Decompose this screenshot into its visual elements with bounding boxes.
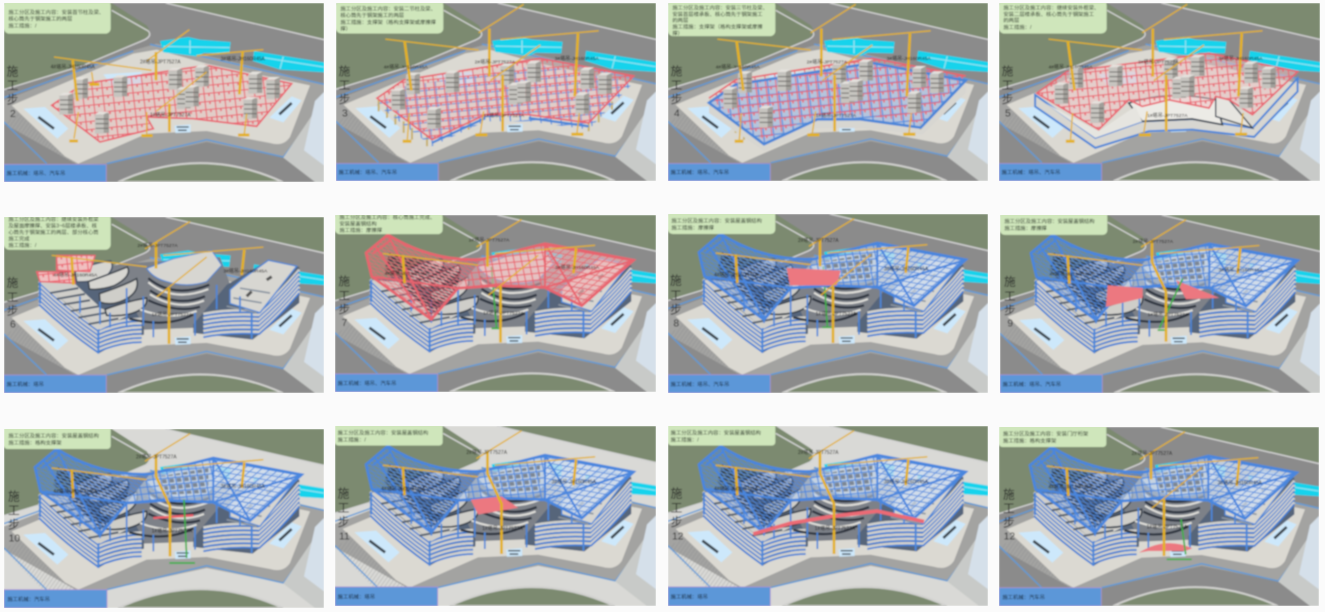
step label: 施 (1002, 65, 1014, 78)
step label: 施 (7, 65, 19, 78)
crane labels: 4#塔吊-JH160R45A (714, 271, 759, 278)
crane labels: 1#塔吊-JPT7527A (150, 111, 191, 118)
crane labels: 1#塔吊-JPT7527A (816, 310, 857, 317)
step label: 步 (671, 516, 682, 529)
step label: 施 (1004, 275, 1016, 288)
crane labels: 4#塔吊-JH160R45A (53, 488, 98, 495)
step label: 工 (7, 292, 18, 304)
crane labels: 2#塔吊-JPT7527A (798, 237, 839, 244)
crane labels: 2#塔吊-JPT7527A (140, 59, 181, 66)
callout: step content (4, 0, 111, 34)
machinery bar: 施工机械：塔吊、汽车吊 (1002, 168, 1060, 176)
site model with blue roof and red entrance truss (999, 427, 1319, 606)
step label (671, 488, 684, 542)
site model with frame and first floor decks (668, 3, 988, 181)
panel: construction step 12 (entrance hall truss) (999, 427, 1319, 606)
callout: step content: 施工分区及施工内容：安装屋盖钢结构 (8, 432, 99, 440)
step label: 施 (1003, 488, 1015, 501)
site model with blue roof and red flanking sections (1000, 215, 1320, 393)
step label (8, 490, 20, 545)
step label: 工 (339, 79, 351, 92)
crane labels: 1#塔吊-JPT7527A (152, 311, 193, 318)
step label: 5 (1005, 108, 1011, 119)
panel: construction step 9 (1000, 215, 1320, 393)
site model with flat steel frame (4, 3, 324, 182)
panel: construction step 10 (4, 429, 324, 608)
red roof sections (1106, 280, 1219, 307)
step label (7, 65, 19, 120)
machinery bar (999, 163, 1102, 181)
step label: 步 (671, 93, 682, 106)
crane labels: 4#塔吊-JH160R45A (384, 270, 429, 277)
crane labels (714, 449, 929, 532)
callout: step content: 的两层 (672, 16, 688, 24)
crane labels: 3#塔吊-JH160R45A (552, 479, 597, 486)
crane labels: 3#塔吊-JH160R45A (884, 479, 929, 486)
callout: step content (336, 0, 443, 33)
red roof section (787, 268, 841, 285)
step label: 12 (672, 531, 684, 542)
crane labels: 3#塔吊-JH160R45A (1219, 266, 1263, 273)
crane labels: 4#塔吊-JH160R45A (51, 64, 96, 71)
crane labels: 1#塔吊-JPT7527A (482, 525, 523, 532)
callout: step content: 安装屋盖钢结构 (339, 220, 377, 228)
red entrance truss (1139, 543, 1192, 553)
crane labels: 2#塔吊-JPT7527A (469, 236, 510, 243)
step label: 6 (10, 320, 16, 330)
step label: 工 (338, 502, 350, 515)
panel: construction step 11 (335, 426, 656, 606)
crane labels: 3#塔吊-JH160R45A (887, 55, 931, 62)
crane labels: 3#塔吊-JH160R45A (555, 55, 599, 62)
step label: 7 (342, 318, 348, 329)
step label (670, 275, 682, 329)
step label: 2 (10, 109, 16, 120)
step label: 步 (339, 93, 350, 106)
callout: step content: 及屋面摩擦撑、安装3~6层楼承板、核 (8, 222, 98, 229)
step label: 4 (674, 108, 680, 119)
callout: step content: 施工措施：摩擦撑 (339, 226, 383, 234)
crane labels: 2#塔吊-JPT7527A (137, 242, 178, 249)
callout: step content: 施工分区及施工内容：安装门厅桁架 (1003, 430, 1089, 438)
callout: step content: 施工措施：摩擦撑 (1004, 224, 1048, 232)
machinery bar (335, 587, 438, 606)
crane labels (714, 237, 929, 317)
site model with blue roof and red centre (335, 426, 656, 606)
machinery bar (4, 375, 106, 393)
callout: step content (999, 424, 1106, 447)
crane labels: 3#塔吊-JH160R45A (1218, 55, 1263, 62)
crane labels: 4#塔吊-JH160R45A (714, 485, 759, 492)
crane labels: 1#塔吊-JPT7527A (484, 112, 525, 119)
callout: step content (335, 212, 443, 234)
callout: step content: 施工措施：支撑架（格构支撑架或摩擦撑 (340, 18, 437, 26)
crane labels: 4#塔吊-JH160R45A (384, 63, 428, 70)
step label: 10 (9, 534, 20, 545)
machinery bar: 施工机械：塔吊 (7, 380, 44, 388)
crane labels: 1#塔吊-JPT7527A (1147, 112, 1188, 119)
crane labels: 3#塔吊-JH160R45A (223, 268, 268, 275)
step label: 步 (7, 94, 18, 107)
callout: step content: 施工措施：格构支撑架 (1003, 436, 1057, 444)
callout: step content: 施工措施：摩擦撑 (671, 223, 715, 231)
step label: 工 (670, 289, 682, 302)
machinery bar (336, 163, 438, 181)
machinery bar: 施工机械：汽车吊 (7, 595, 50, 603)
crane labels: 2#塔吊-JPT7527A (136, 453, 177, 460)
machinery bar (335, 374, 438, 392)
machinery bar: 施工机械：塔吊、汽车吊 (671, 380, 729, 388)
callout: step content: 安装二层楼承板、核心筒先于钢架施工 (1003, 10, 1095, 18)
panel: construction step 4 (668, 3, 988, 181)
site model with red frame and curved slabs (999, 3, 1320, 181)
machinery bar (1000, 375, 1102, 393)
crane labels: 1#塔吊-JPT7527A (483, 310, 524, 317)
step label: 施 (8, 490, 20, 503)
machinery bar: 施工机械：汽车吊 (1002, 593, 1045, 601)
step label: 工 (1002, 79, 1014, 92)
step label: 8 (673, 318, 679, 329)
crane labels (51, 55, 266, 118)
step label: 工 (7, 80, 19, 93)
callout: step content: 撑） (340, 25, 351, 33)
crane labels: 4#塔吊-JH160R45A (1048, 483, 1093, 490)
callout: step content (668, 423, 775, 445)
callout: step content: 心筒先于钢架施工的两层、部分核心筒 (8, 228, 99, 236)
machinery bar (4, 590, 107, 608)
step label: 3 (342, 108, 348, 119)
crane labels (1048, 55, 1263, 119)
callout: step content: 的两层 (1003, 16, 1019, 24)
crane labels (1048, 450, 1263, 530)
step label (1004, 275, 1016, 330)
callout: step content: 施工分区及施工内容：继续安装外框梁、 (1003, 4, 1099, 12)
callout: step content: 施工措施：格构支撑架 (8, 439, 62, 447)
step label: 步 (338, 303, 350, 316)
crane labels: 1#塔吊-JPT7527A (1148, 311, 1189, 318)
crane labels (384, 236, 600, 317)
crane labels: 4#塔吊-JH160R45A (1048, 63, 1093, 70)
step label: 施 (338, 275, 350, 288)
step label: 工 (1003, 502, 1015, 515)
step label: 施 (671, 65, 683, 78)
step label: 施 (670, 275, 682, 288)
machinery bar: 施工机械：塔吊、汽车吊 (338, 379, 396, 387)
red roof member (153, 515, 193, 518)
step label (671, 65, 683, 119)
site model with blue roof and red bar (4, 429, 324, 608)
step label: 步 (670, 303, 682, 316)
step label (7, 277, 19, 330)
step label: 步 (1002, 93, 1013, 106)
callout: step content (668, 211, 775, 234)
crane labels (381, 449, 597, 532)
site model with concrete terraced building (4, 217, 324, 393)
step label: 步 (8, 518, 20, 531)
machinery bar (999, 588, 1101, 606)
crane labels: 3#塔吊-JH160R45A (221, 55, 266, 62)
step label: 12 (1004, 532, 1015, 543)
callout: step content: 施工措施：/ (671, 435, 699, 443)
step label: 施 (671, 488, 683, 501)
step label: 施 (339, 65, 351, 78)
machinery bar: 施工机械：塔吊 (671, 592, 708, 600)
callout: step content (999, 0, 1107, 33)
step label: 工 (338, 289, 350, 302)
machinery bar: 施工机械：塔吊 (338, 592, 375, 600)
panel: construction step 5 (999, 3, 1320, 181)
callout: step content (4, 426, 111, 449)
callout: step content: 施工分区及施工内容：安装屋盖钢结构 (671, 429, 761, 437)
crane labels: 3#塔吊-JH160R45A (884, 266, 929, 273)
machinery bar: 施工机械：塔吊、汽车吊 (1003, 380, 1061, 388)
step label: 工 (1004, 290, 1016, 303)
step label: 步 (1003, 516, 1015, 529)
callout: step content: 施工分区及施工内容：安装屋盖钢结构 (338, 429, 428, 437)
crane labels: 1#塔吊-JPT7527A (815, 525, 856, 532)
step label (1003, 488, 1015, 543)
step label: 工 (671, 502, 683, 515)
site model with blue roof and red central section (668, 214, 988, 393)
machinery bar: 施工机械：塔吊、汽车吊 (339, 168, 397, 176)
callout: step content: 施工完成 (8, 235, 30, 243)
red front edge (753, 511, 924, 534)
callout: step content: 核心筒先于钢架施工的两层 (340, 11, 404, 19)
panel: construction step 7 (335, 213, 656, 392)
machinery bar (668, 163, 770, 181)
crane labels: 1#塔吊-JPT7527A (816, 112, 857, 119)
crane labels: 1#塔吊-JPT7527A (1147, 523, 1188, 530)
site model with blue roof and red front edge (668, 426, 988, 606)
crane labels (1049, 238, 1263, 318)
crane labels: 2#塔吊-JPT7527A (1138, 58, 1179, 65)
crane labels: 2#塔吊-JPT7527A (1133, 238, 1174, 245)
machinery bar: 施工机械：塔吊、汽车吊 (7, 169, 65, 177)
callout: step content (4, 214, 111, 250)
panel: construction step 6 (4, 215, 324, 393)
crane labels: 2#塔吊-JPT7527A (1132, 450, 1173, 457)
callout: step content: 安装首层楼承板、核心筒先于钢架施工 (672, 10, 763, 18)
panel: construction step 12 (668, 426, 988, 606)
crane labels: 2#塔吊-JPT7527A (807, 58, 848, 65)
crane labels: 2#塔吊-JPT7527A (466, 449, 508, 456)
step label (339, 65, 351, 119)
crane labels (53, 453, 266, 534)
callout: step content: 施工措施：/ (8, 241, 37, 249)
crane labels: 1#塔吊-JPT7527A (152, 527, 193, 534)
callout: step content: 核心筒先于钢架施工的两层 (8, 15, 73, 23)
callout: step content: 施工措施：/ (8, 21, 37, 29)
callout: step content: 施工措施：/ (338, 435, 366, 443)
step label: 11 (339, 531, 350, 542)
crane labels (716, 55, 931, 119)
panel: construction step 8 (668, 214, 988, 393)
callout: step content (668, 0, 775, 37)
site model with raised frame (336, 3, 656, 181)
callout: step content (1000, 212, 1107, 235)
step label: 步 (338, 516, 349, 529)
crane labels: 2#塔吊-JPT7527A (798, 449, 839, 456)
callout: step content: 施工分区及施工内容：安装屋盖钢结构 (1004, 217, 1095, 225)
callout: step content: 施工分区及施工内容：安装首节柱及梁、 (8, 8, 104, 16)
crane labels: 3#塔吊-JH160R45A (1218, 479, 1263, 486)
machinery bar (668, 375, 770, 393)
crane labels: 4#塔吊-JH160R45A (1049, 270, 1094, 277)
step label: 工 (671, 79, 683, 92)
crane labels: 4#塔吊-JH160R45A (381, 485, 426, 492)
step label: 步 (1004, 304, 1016, 317)
crane labels: 4#塔吊-JH160R45A (716, 63, 760, 70)
crane labels (384, 55, 599, 119)
step label: 施 (338, 488, 350, 501)
callout: step content (335, 423, 443, 445)
machinery bar: 施工机械：塔吊、汽车吊 (671, 168, 729, 176)
callout: step content: 施工措施：/ (1003, 23, 1032, 31)
step label (338, 275, 350, 329)
crane labels: 3#塔吊-JH160R45A (555, 264, 600, 271)
callout: step content: 撑） (672, 29, 683, 37)
machinery bar (668, 587, 770, 606)
callout: step content: 施工分区及施工内容：安装二节柱及梁、 (340, 5, 436, 13)
panel: construction step 2 (4, 3, 324, 182)
callout: step content: 施工分区及施工内容：继续安装外框梁 (8, 215, 99, 223)
callout: step content: 施工分区及施工内容：核心筒施工完成、 (339, 213, 435, 221)
crane labels (53, 242, 268, 318)
crane labels: 3#塔吊-JH160R45A (221, 483, 266, 490)
step label: 施 (7, 277, 19, 289)
red roof section (471, 496, 518, 514)
step label: 步 (7, 305, 18, 318)
step label (1002, 65, 1014, 119)
site model with red roof truss (335, 215, 656, 392)
machinery bar (4, 164, 106, 182)
callout: step content: 施工分区及施工内容：安装屋盖钢结构 (671, 217, 762, 225)
step label: 工 (8, 504, 20, 517)
step label: 9 (1007, 319, 1013, 330)
callout: step content: 施工分区及施工内容：安装三节柱及梁、 (672, 4, 768, 12)
callout: step content: 施工措施：支撑架（格构支撑架或摩擦 (672, 23, 763, 31)
step label (338, 488, 350, 542)
crane labels: 2#塔吊-JPT7527A (475, 58, 516, 65)
crane labels: 4#塔吊-JH160R45A (53, 272, 98, 279)
panel: construction step 3 (336, 3, 656, 181)
